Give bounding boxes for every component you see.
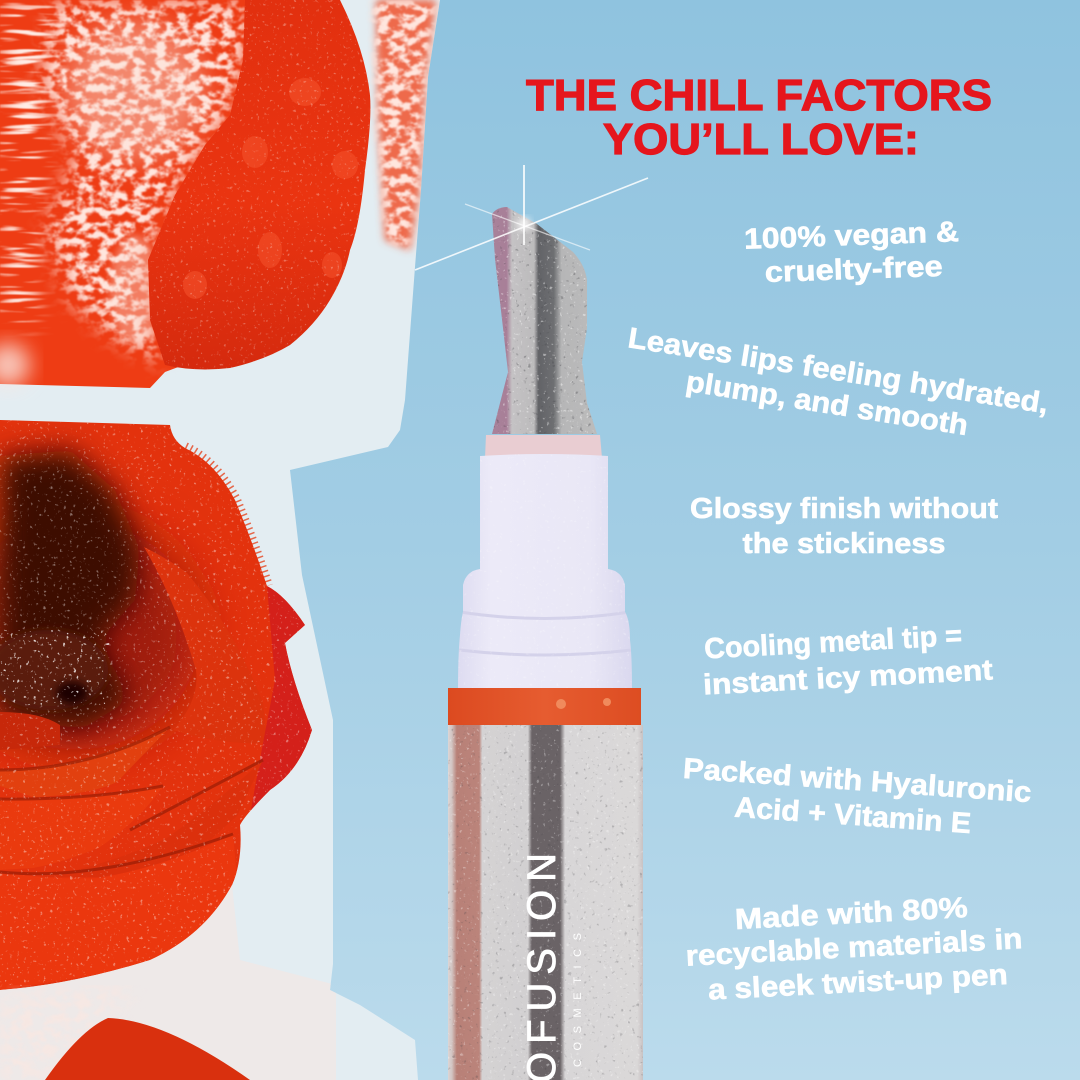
rose petal four: [258, 762, 262, 770]
product: lip pen: [448, 205, 643, 1080]
benefit: cooling: instant icy moment: [702, 654, 994, 702]
benefit: hyaluronic: Acid + Vitamin E: [733, 792, 972, 840]
brand name: OFUSION: [520, 853, 564, 1080]
benefit: hydrated: Leaves lips feeling hydrated,: [626, 322, 1051, 420]
rose upper right petal: [144, 547, 222, 732]
benefit: recyclable: recyclable materials in: [685, 923, 1023, 973]
rose petal three: [82, 796, 106, 798]
benefit: vegan: [744, 216, 961, 290]
brand sub text: COSMETICS: [572, 933, 584, 1067]
rose droplets: [0, 410, 320, 1000]
petal creases: [0, 727, 263, 874]
bottom ice pink frost: [8, 985, 84, 1052]
title: THE CHILL FACTORS: [526, 71, 992, 120]
upper rose petal: [148, 0, 370, 369]
silver body: [448, 725, 643, 1080]
rose dark heart: [0, 450, 140, 730]
rose shadow ring: [0, 520, 200, 750]
rose petal two: [0, 727, 170, 797]
metal applicator tip: [490, 205, 600, 437]
sparkle on tip: [415, 165, 648, 270]
bottom rose peek: [45, 1018, 250, 1080]
rose outer red edge: [250, 586, 312, 815]
benefit: hyaluronic: [680, 753, 1032, 844]
rose frost fringe: [185, 448, 267, 586]
benefit: cooling: Cooling metal tip =: [703, 620, 963, 665]
benefit: recyclable: a sleek twist-up pen: [707, 959, 1009, 1007]
rose sparkling centre: [0, 630, 110, 710]
petal droplets: [140, 0, 375, 380]
rose inner petal: [0, 712, 60, 750]
right frost in upper block: [369, 0, 440, 254]
title: [526, 71, 992, 164]
benefit: vegan: cruelty-free: [764, 251, 943, 289]
benefit: hydrated: plump, and smooth: [684, 366, 970, 442]
benefit: recyclable: Made with 80%: [734, 892, 969, 936]
benefit: glossy: the stickiness: [742, 528, 946, 560]
benefit: recyclable: [683, 889, 1025, 1008]
rose bottom petal: [0, 834, 237, 990]
benefit: glossy: Glossy finish without: [690, 493, 998, 525]
benefit: hyaluronic: Packed with Hyaluronic: [682, 753, 1032, 809]
upper rose frosted area: [0, 0, 260, 388]
title: YOU’LL LOVE:: [603, 115, 919, 164]
orange ring: [448, 688, 641, 725]
lavender cap and twist band: [455, 450, 635, 692]
lower ice frost: [0, 885, 336, 1080]
benefit: cooling: [700, 618, 994, 702]
benefit: glossy: [690, 493, 998, 560]
collar: [485, 435, 602, 458]
ice base: [0, 0, 450, 1080]
ice block with frozen roses: [0, 0, 450, 1080]
benefit: vegan: 100% vegan &: [744, 216, 960, 256]
lower rose: [0, 410, 320, 1000]
benefit: hydrated: [620, 322, 1051, 454]
